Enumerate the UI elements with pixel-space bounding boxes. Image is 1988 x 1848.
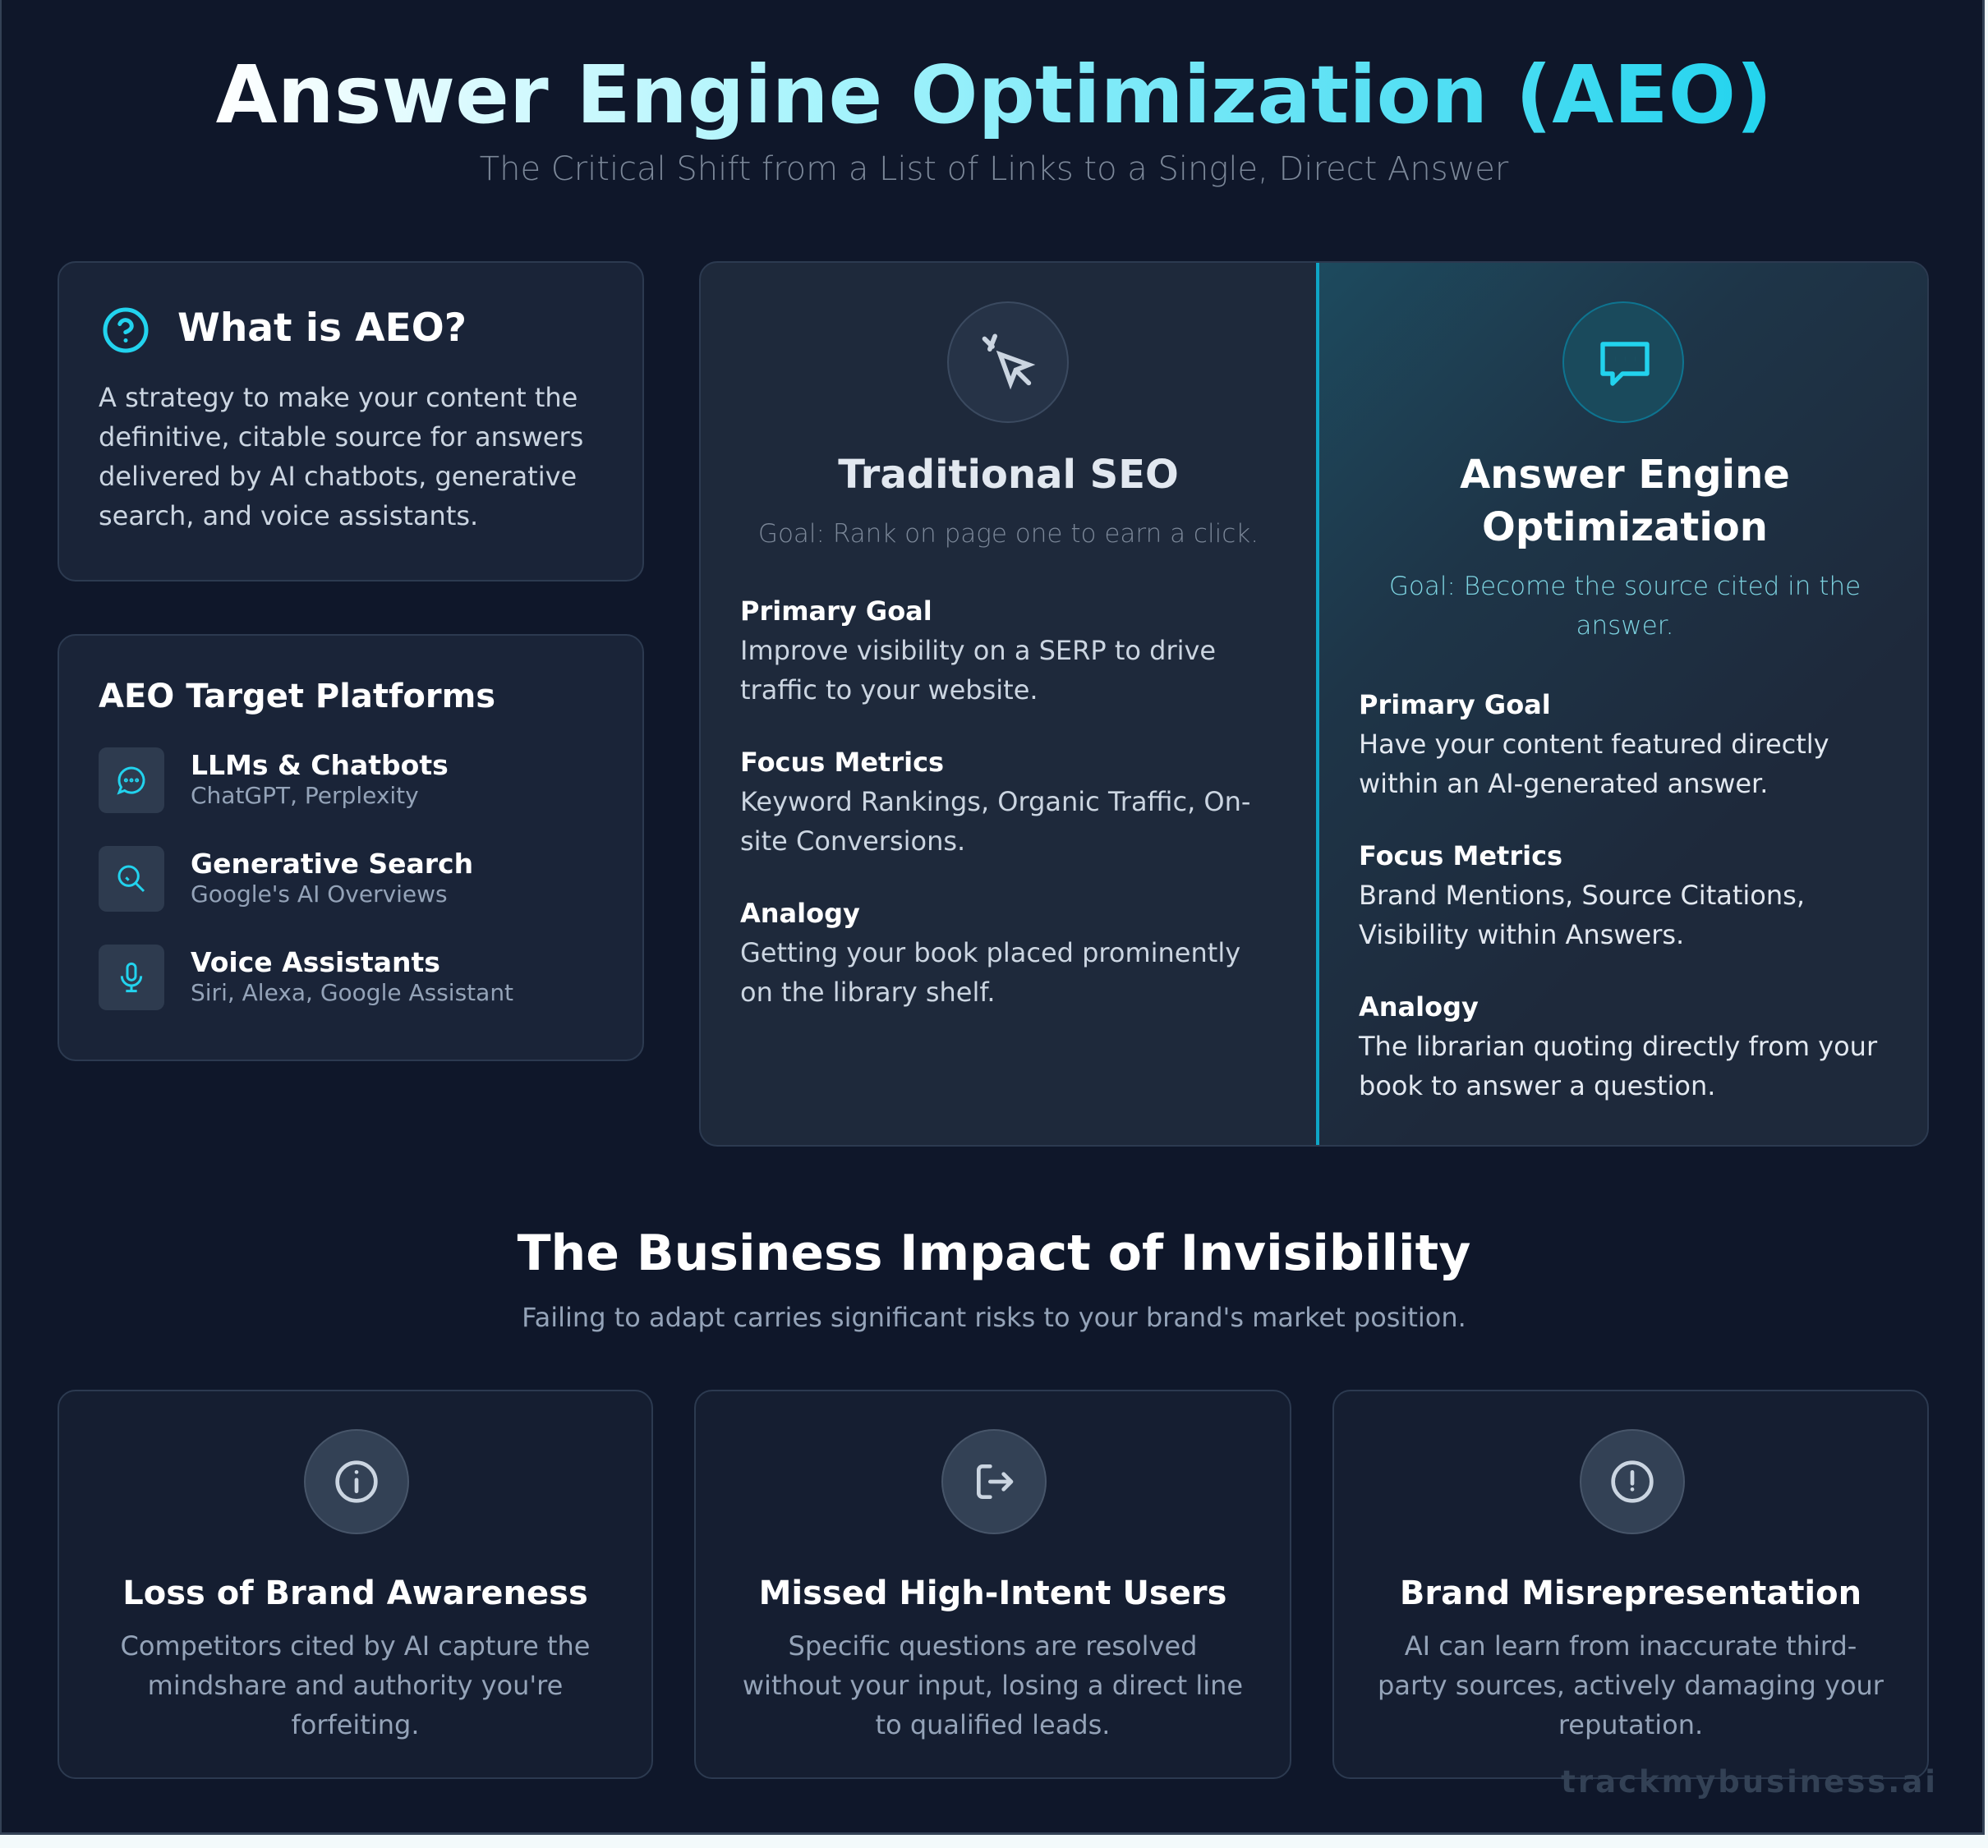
icon: search [99, 846, 164, 912]
divider [1316, 263, 1319, 1148]
item: voice [99, 945, 513, 1010]
column: traditional SEO [740, 301, 1259, 1008]
item: generative search: Generative Search [191, 848, 473, 880]
details [740, 595, 1250, 1008]
icon: message [1562, 301, 1684, 423]
item: generative search: Google's AI Overviews [191, 880, 448, 908]
watermark: trackmybusiness.ai [1561, 1764, 1938, 1800]
details: Focus Metrics [1359, 840, 1562, 871]
panel: comparison [699, 261, 1929, 1147]
section heading: The Business Impact of Invisibility [518, 1225, 1470, 1282]
card: loss of brand awareness: Competitors cited by AI capture the mindshare and authority you're forfeiting. [121, 1630, 590, 1740]
details: Primary Goal [740, 595, 932, 627]
details: Analogy [740, 898, 860, 929]
item: voice: Voice Assistants [191, 946, 440, 978]
AEO side gradient [1318, 263, 1930, 1148]
details: Brand Mentions, Source Citations, Visibility within Answers. [1359, 880, 1805, 950]
icon: alert [1580, 1429, 1685, 1534]
icon: question [104, 307, 148, 353]
details: Keyword Rankings, Organic Traffic, On-site Conversions. [740, 786, 1250, 857]
details: Analogy [1359, 991, 1479, 1023]
item: voice: Siri, Alexa, Google Assistant [191, 979, 513, 1006]
card: loss of brand awareness [58, 1390, 653, 1779]
details: Improve visibility on a SERP to drive traffic to your website. [740, 635, 1216, 706]
column: AEO [1359, 301, 1878, 1101]
item: LLMs: LLMs & Chatbots [191, 749, 449, 781]
subtitle: The Critical Shift from a List of Links to a Single, Direct Answer [480, 150, 1508, 188]
card: missed users: Specific questions are resolved without your input, losing a direct line to qualified leads. [743, 1630, 1243, 1740]
panel: platforms [58, 634, 644, 1061]
details: The librarian quoting directly from your book to answer a question. [1359, 1031, 1877, 1101]
card: misrepresentation: Brand Misrepresentation [1400, 1574, 1861, 1612]
section subtitle: Failing to adapt carries significant risks to your brand's market position. [522, 1302, 1466, 1333]
details: Primary Goal [1359, 689, 1551, 720]
details: Getting your book placed prominently on the library shelf. [740, 937, 1240, 1008]
icon: exit [941, 1429, 1047, 1534]
goal: Goal: Become the source cited in the answer. [1389, 572, 1861, 641]
item: LLMs [99, 747, 449, 813]
heading: What is AEO? [177, 306, 467, 351]
heading [1460, 452, 1790, 550]
card: missed users: Missed High-Intent Users [759, 1574, 1226, 1612]
title: Answer Engine Optimization (AEO) [216, 48, 1772, 141]
text: A strategy to make your content the definitive, citable source for answers delivered by AI chatbots, generative search, and voice assistants. [99, 382, 583, 531]
icon: chat [99, 747, 164, 813]
details: Have your content featured directly within an AI-generated answer. [1359, 729, 1829, 799]
heading: Answer Engine [1460, 452, 1790, 498]
icon: mic [99, 945, 164, 1010]
item: LLMs: ChatGPT, Perplexity [191, 782, 419, 809]
item: generative search [99, 846, 473, 912]
panel: what is AEO [58, 261, 644, 582]
card: loss of brand awareness: Loss of Brand Awareness [122, 1574, 588, 1612]
details: Focus Metrics [740, 747, 944, 778]
icon: info [304, 1429, 409, 1534]
icon: cursor [947, 301, 1069, 423]
card: missed users [694, 1390, 1291, 1779]
heading: Optimization [1482, 504, 1768, 550]
heading: AEO Target Platforms [99, 678, 495, 715]
goal: Goal: Rank on page one to earn a click. [758, 519, 1259, 549]
heading: Traditional SEO [838, 452, 1179, 498]
card: misrepresentation [1332, 1390, 1929, 1779]
card: misrepresentation: AI can learn from inaccurate third-party sources, actively damaging your reputation. [1378, 1630, 1884, 1740]
details [1359, 689, 1878, 1101]
